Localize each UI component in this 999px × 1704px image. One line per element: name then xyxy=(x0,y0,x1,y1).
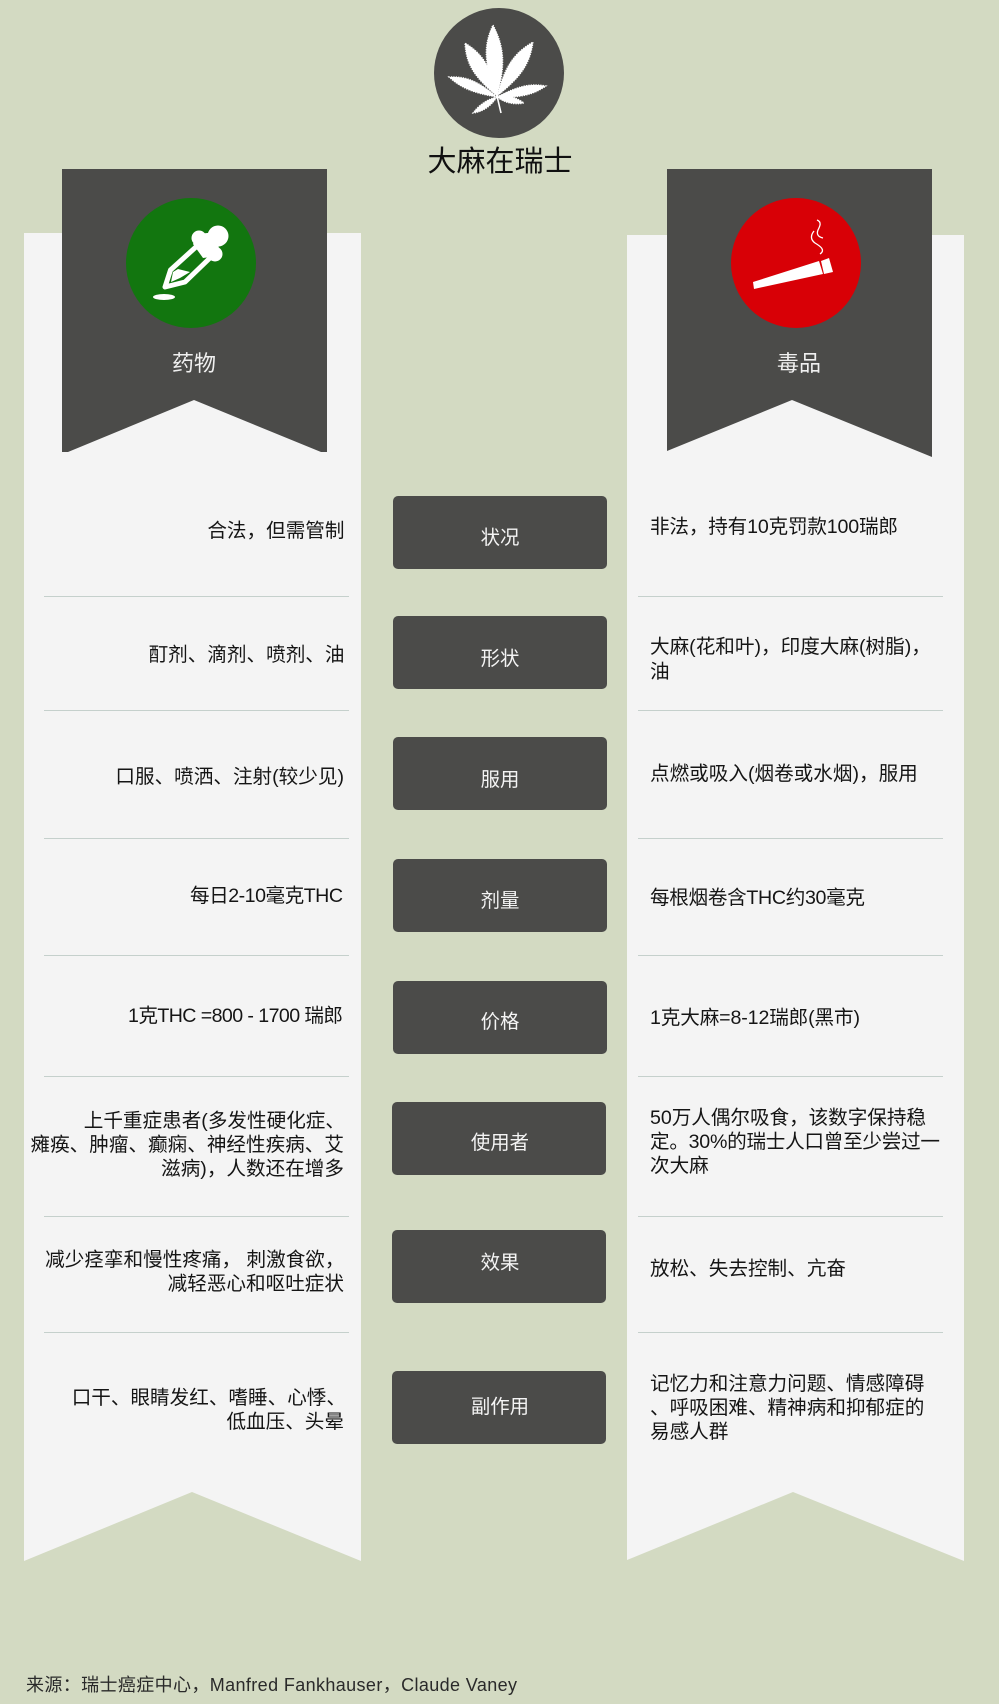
category: side effects xyxy=(392,1371,606,1444)
medicine text: status: 合法，但需管制 xyxy=(207,520,344,542)
category: status: 状况 xyxy=(481,527,519,549)
drug text: side effects xyxy=(650,1373,924,1443)
medicine text: price: 1克THC =800 - 1700 瑞郎 xyxy=(128,1005,343,1027)
medicine text: users: 瘫痪、肿瘤、癫痫、神经性疾病、艾 xyxy=(30,1134,344,1156)
category: status xyxy=(393,496,607,569)
drug text: side effects: 、呼吸困难、精神病和抑郁症的 xyxy=(650,1397,924,1419)
medicine text: effects: 减少痉挛和慢性疼痛， 刺激食欲， xyxy=(45,1249,344,1271)
category: effects: 效果 xyxy=(481,1252,519,1274)
drug text: side effects: 易感人群 xyxy=(650,1421,728,1443)
category: dose xyxy=(393,859,607,932)
medicine text: effects: 减轻恶心和呕吐症状 xyxy=(168,1273,344,1295)
drug text: form: 油 xyxy=(650,661,670,683)
header ribbon: drug xyxy=(667,169,932,457)
medicine text: intake: 口服、喷洒、注射(较少见) xyxy=(115,766,344,788)
medicine text: users: 滋病)，人数还在增多 xyxy=(161,1158,344,1180)
category: side effects: 副作用 xyxy=(471,1396,529,1418)
medicine text: dose: 每日2-10毫克THC xyxy=(190,885,343,907)
category: intake: 服用 xyxy=(481,769,519,791)
category: users xyxy=(392,1102,606,1175)
medicine text: form: 酊剂、滴剂、喷剂、油 xyxy=(149,644,344,666)
medicine text: side effects: 低血压、头晕 xyxy=(226,1411,344,1433)
drug text: users: 次大麻 xyxy=(650,1155,709,1177)
drug text: side effects: 记忆力和注意力问题、情感障碍 xyxy=(650,1373,924,1395)
category: intake xyxy=(393,737,607,810)
category: price: 价格 xyxy=(481,1011,519,1033)
medicine text: side effects: 口干、眼睛发红、嗜睡、心悸、 xyxy=(72,1387,346,1409)
drug text: form: 大麻(花和叶)，印度大麻(树脂)， xyxy=(650,636,931,658)
drug text: users xyxy=(650,1107,940,1177)
category: users: 使用者 xyxy=(471,1132,529,1154)
header ribbon: medicine xyxy=(62,169,327,452)
category: form xyxy=(393,616,607,689)
category: price xyxy=(393,981,607,1054)
title: 大麻在瑞士 xyxy=(427,145,573,178)
source footer: 来源：瑞士癌症中心，Manfred Fankhauser，Claude Vaney xyxy=(26,1675,517,1695)
label: medicine: 药物 xyxy=(172,351,216,376)
panel: drug column xyxy=(627,235,964,1561)
drug text: effects: 放松、失去控制、亢奋 xyxy=(650,1258,846,1280)
icon: dropper xyxy=(126,198,256,328)
category: effects xyxy=(392,1230,606,1303)
drug text: status: 非法，持有10克罚款100瑞郎 xyxy=(650,516,898,538)
drug text: dose: 每根烟卷含THC约30毫克 xyxy=(650,887,865,909)
panel: medicine column xyxy=(24,233,361,1561)
drug text: form xyxy=(650,636,931,683)
drug text: users: 定。30%的瑞士人口曾至少尝过一 xyxy=(650,1131,940,1153)
category: dose: 剂量 xyxy=(481,890,519,912)
label: drug: 毒品 xyxy=(777,351,821,376)
drug text: intake: 点燃或吸入(烟卷或水烟)，服用 xyxy=(650,763,918,785)
icon: cannabis logo xyxy=(434,8,564,138)
icon: joint xyxy=(731,198,861,328)
category: form: 形状 xyxy=(481,648,519,670)
drug text: users: 50万人偶尔吸食，该数字保持稳 xyxy=(650,1107,926,1129)
medicine text: side effects xyxy=(72,1387,346,1433)
drug text: price: 1克大麻=8-12瑞郎(黑市) xyxy=(650,1007,860,1029)
medicine text: users xyxy=(30,1110,345,1180)
medicine text: effects xyxy=(45,1249,344,1295)
medicine text: users: 上千重症患者(多发性硬化症、 xyxy=(84,1110,345,1132)
